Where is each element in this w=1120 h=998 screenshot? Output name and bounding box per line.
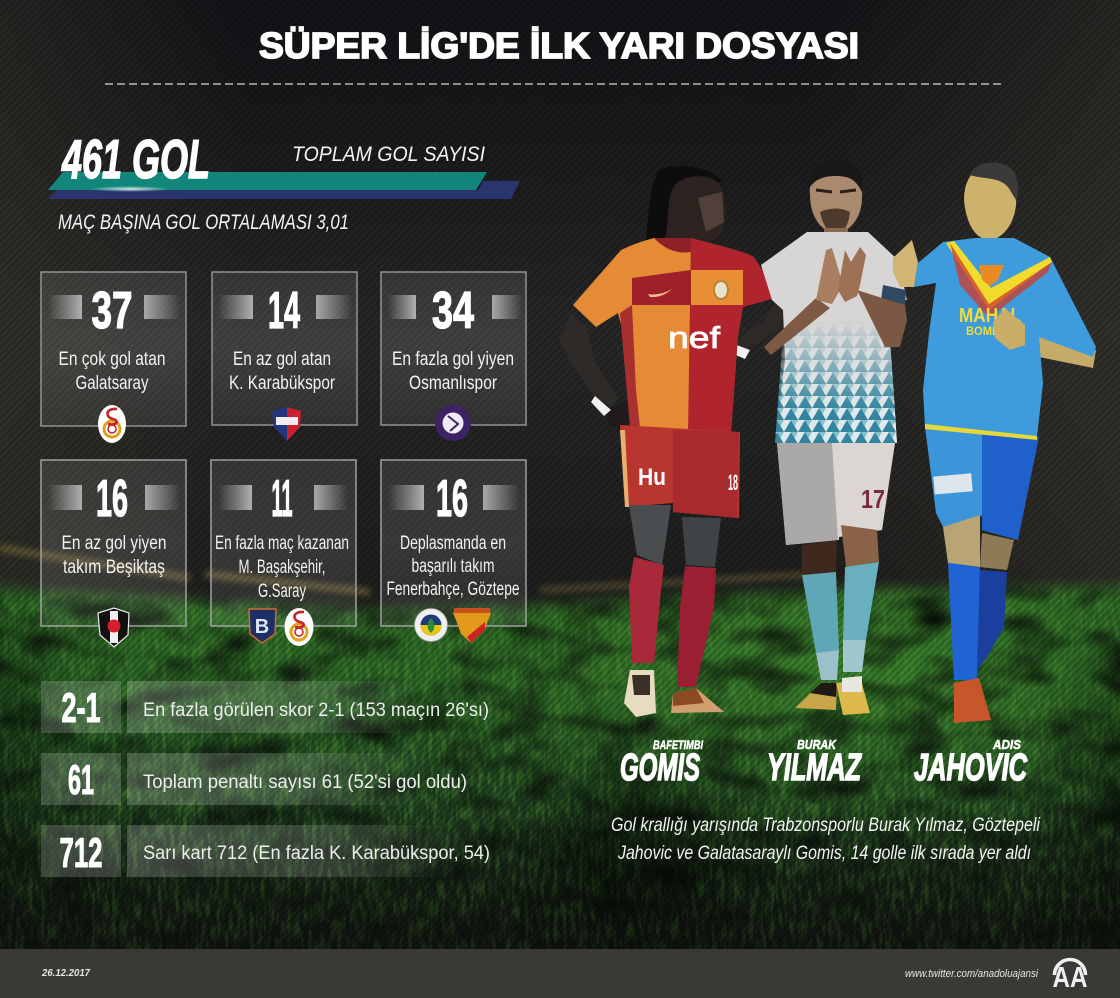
player illustration: Gomis: nef: [668, 320, 720, 355]
total goals banner: [48, 128, 520, 234]
panel: best away team: [381, 460, 526, 643]
panel: most wins: En fazla maç kazanan: [215, 533, 349, 554]
player illustration: Gomis: Hu: [638, 464, 666, 491]
panel: fewest goals scored: 14: [268, 282, 300, 340]
label: goals per match: MAÇ BAŞINA GOL ORTALAMASI 3,01: [58, 211, 349, 234]
player illustration: Jahovic: [893, 163, 1096, 723]
title: SÜPER LİG'DE İLK YARI DOSYASI: [259, 25, 859, 66]
icon: Karabükspor crest: [272, 407, 301, 441]
player illustration: Gomis: [559, 166, 787, 717]
panel: fewest goals conceded: 16: [96, 470, 128, 528]
footer bar: [0, 949, 1120, 998]
icon: Anadolu Agency logo: AA: [1052, 962, 1088, 994]
panel: most goals conceded: [381, 272, 526, 441]
player illustration: Yılmaz: [761, 159, 907, 715]
player name: Yılmaz: [767, 737, 862, 789]
panel: best away team: 16: [436, 470, 468, 528]
panel: fewest goals conceded: En az gol yiyen: [62, 533, 166, 554]
player name: Gomis: GOMIS: [620, 747, 700, 789]
icon: Galatasaray crest: [284, 608, 314, 646]
stat row: most common score: [41, 681, 489, 733]
panel: most goals scored: En çok gol atan: [58, 349, 166, 370]
player name: Jahovic: JAHOVIC: [914, 747, 1027, 789]
caption: top scorers: Jahovic ve Galatasaraylı Gomis, 14 golle ilk sırada yer aldı: [617, 843, 1031, 864]
panel: best away team: Deplasmanda en: [400, 533, 506, 554]
panel: most wins: 11: [272, 470, 292, 528]
stat row: yellow cards: 712: [60, 829, 102, 876]
label: toplam gol sayısı: TOPLAM GOL SAYISI: [292, 143, 485, 166]
icon: Beşiktaş crest: [98, 608, 129, 647]
panel: fewest goals conceded: takım Beşiktaş: [63, 557, 165, 578]
icon: Fenerbahçe crest: [414, 608, 448, 642]
panel: fewest goals scored: K. Karabükspor: [229, 373, 336, 394]
panel: most goals scored: [41, 272, 186, 443]
stat row: yellow cards: [41, 825, 490, 877]
panel: most wins: M. Başakşehir,: [238, 557, 326, 578]
player name: Gomis: [620, 738, 704, 789]
panel: most goals conceded: 34: [432, 282, 474, 340]
panel: best away team: başarılı takım: [412, 556, 494, 577]
icon: Başakşehir crest: [249, 609, 276, 643]
caption: top scorers: [611, 815, 1041, 864]
panel: best away team: Fenerbahçe, Göztepe: [386, 579, 520, 600]
stat row: most common score: En fazla görülen skor 2-1 (153 maçın 26'sı): [143, 700, 489, 721]
panel: most goals conceded: Osmanlıspor: [409, 373, 498, 394]
player name: Gomis: BAFETIMBI: [653, 738, 704, 752]
player illustration: Yılmaz: 17: [861, 484, 885, 514]
stat row: penalties: Toplam penaltı sayısı 61 (52'si gol oldu): [143, 772, 467, 793]
panel: most goals scored: 37: [92, 282, 132, 340]
panel: most goals conceded: En fazla gol yiyen: [392, 349, 514, 370]
date: 26.12.2017: [41, 968, 90, 979]
panel: most wins: [211, 460, 356, 646]
player name: Jahovic: [914, 737, 1027, 789]
panel: fewest goals scored: En az gol atan: [233, 349, 331, 370]
player illustration: Jahovic: MAHAL: [959, 305, 1021, 327]
panel: fewest goals scored: [212, 272, 357, 441]
panel: most goals scored: Galatsaray: [76, 373, 149, 394]
caption: top scorers: Gol krallığı yarışında Trabzonsporlu Burak Yılmaz, Göztepeli: [611, 815, 1041, 836]
player name: Yılmaz: YILMAZ: [767, 747, 862, 789]
headline: 461 GOL: 461 GOL: [61, 128, 210, 190]
stat row: penalties: 61: [68, 756, 94, 803]
icon: Başakşehir crest: B: [255, 616, 269, 638]
player illustration: Gomis: 18: [728, 470, 738, 495]
icon: Galatasaray crest: [98, 405, 126, 443]
stat row: penalties: [41, 753, 467, 805]
player name: Yılmaz: BURAK: [797, 737, 837, 752]
player name: Jahovic: ADIS: [992, 737, 1021, 752]
player illustration: Jahovic: BOMB: [966, 324, 1000, 338]
stat row: most common score: 2-1: [62, 684, 100, 731]
panel: fewest goals conceded: [41, 460, 186, 647]
icon: Osmanlıspor crest: [435, 405, 471, 441]
twitter address: www.twitter.com/anadoluajansi: [905, 968, 1038, 980]
panel: most wins: G.Saray: [258, 581, 306, 602]
icon: Göztepe crest: [453, 608, 491, 643]
stat row: yellow cards: Sarı kart 712 (En fazla K. Karabükspor, 54): [143, 843, 490, 864]
